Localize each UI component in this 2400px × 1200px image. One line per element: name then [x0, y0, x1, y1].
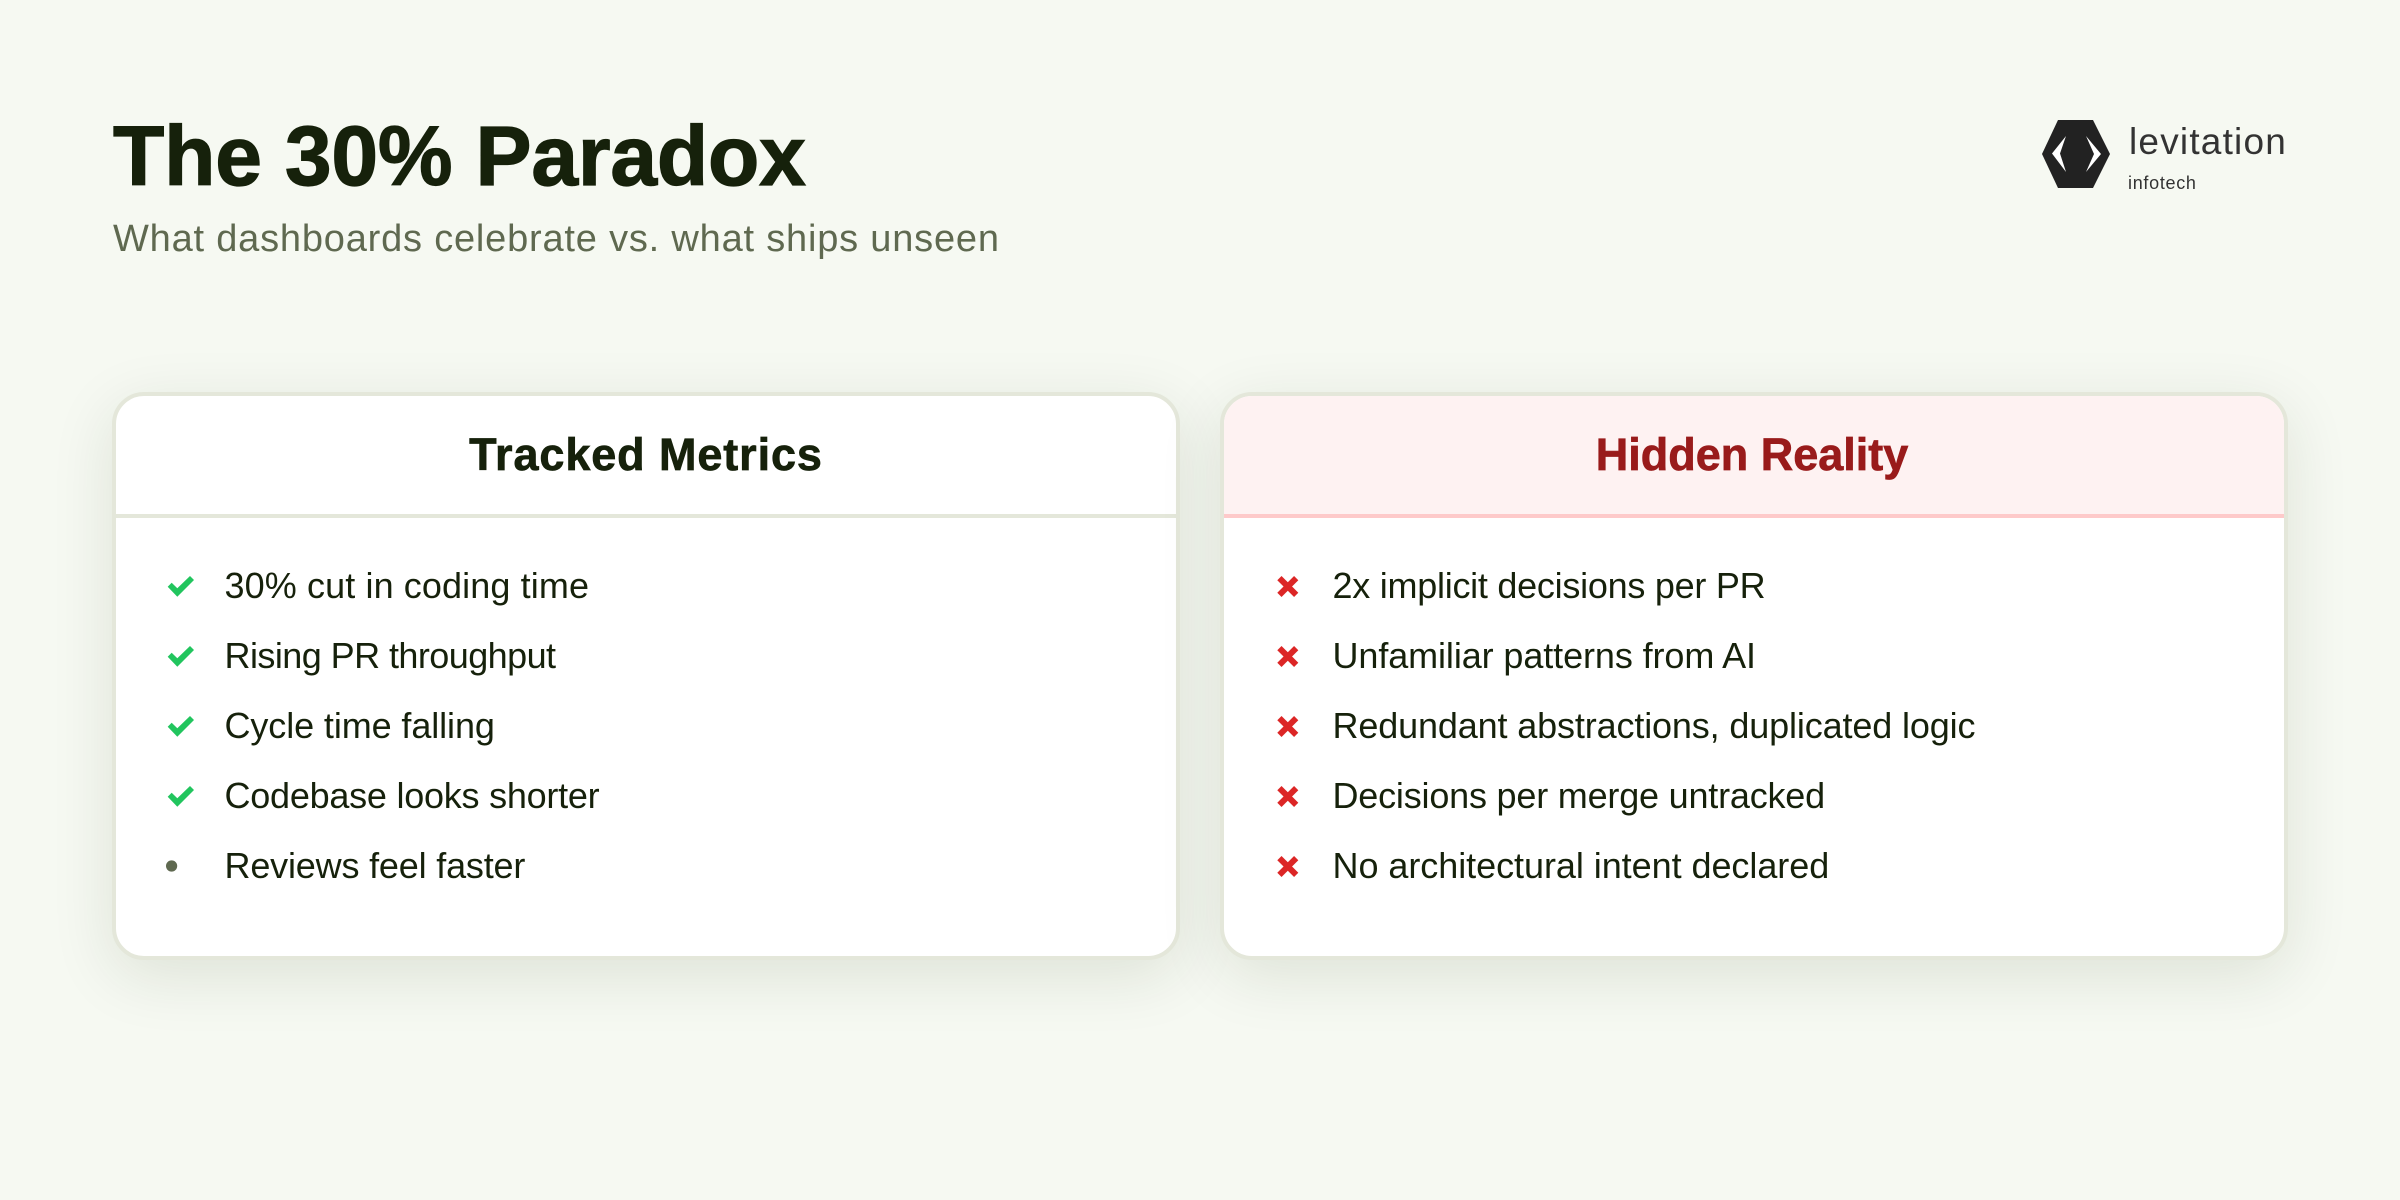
subtitle: What dashboards celebrate vs. what ships unseen: [113, 218, 1000, 260]
item: 30% cut in coding time: 30% cut in coding time: [224, 565, 589, 606]
icon: hexagon with chevrons: [2042, 120, 2110, 188]
item: rising PR throughput: Rising PR throughput: [224, 635, 556, 676]
logo subtext: infotech: [2128, 172, 2197, 192]
panel: hidden reality: [1220, 392, 2288, 960]
panel header: hidden reality: [1224, 396, 2284, 518]
heading: hidden reality: Hidden Reality: [1596, 429, 1908, 480]
panel: tracked metrics: [112, 392, 1180, 960]
item: 2x implicit decisions per PR: 2x implicit decisions per PR: [1332, 565, 1765, 606]
logo: levitation infotech: [2042, 120, 2287, 192]
item: codebase looks shorter: Codebase looks shorter: [224, 775, 599, 816]
item: decisions per merge untracked: Decisions per merge untracked: [1332, 775, 1825, 816]
title: The 30% Paradox: [113, 109, 806, 203]
heading: tracked metrics: Tracked Metrics: [469, 429, 823, 480]
item: redundant abstractions: Redundant abstractions, duplicated logic: [1332, 705, 1975, 746]
item: reviews feel faster: Reviews feel faster: [224, 845, 525, 886]
panel header: tracked metrics: [116, 396, 1176, 518]
logo wordmark: levitation: [2129, 121, 2287, 162]
item: no architectural intent declared: No architectural intent declared: [1332, 845, 1829, 886]
item: cycle time falling: Cycle time falling: [224, 705, 495, 746]
item: unfamiliar patterns from AI: Unfamiliar patterns from AI: [1332, 635, 1756, 676]
